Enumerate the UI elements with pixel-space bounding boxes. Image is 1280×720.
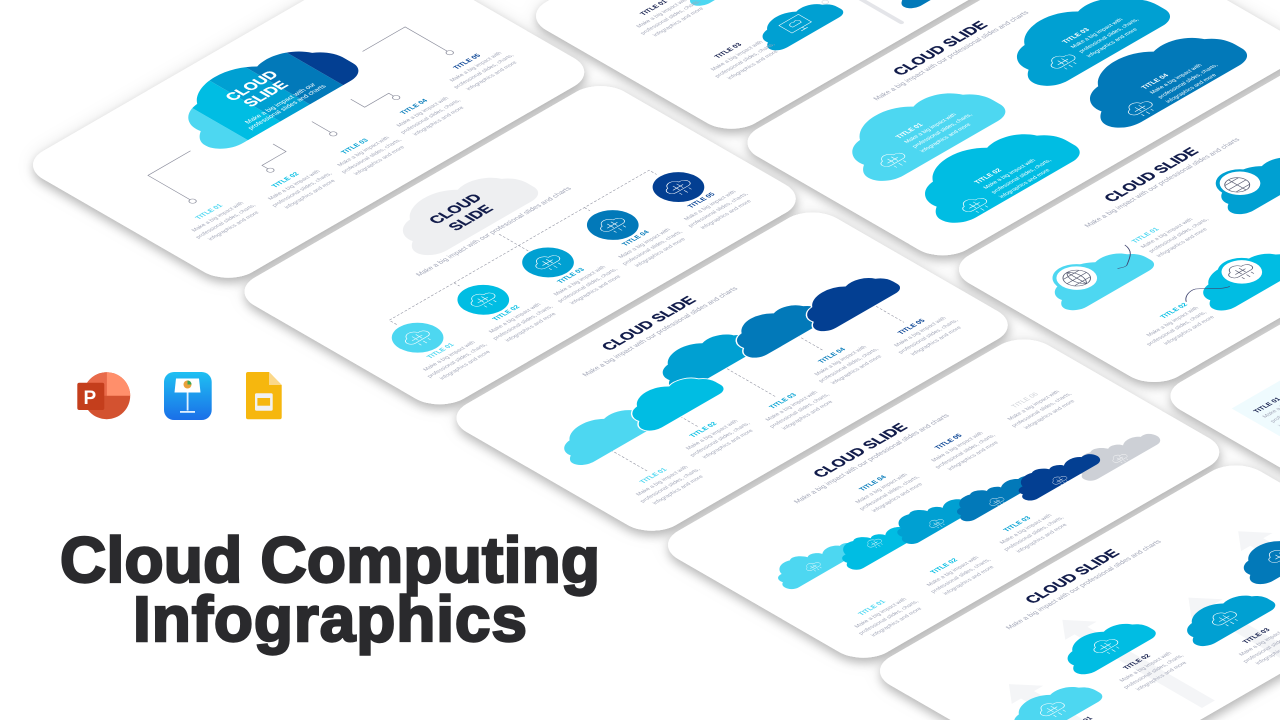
text: title 04: professional slides, charts, bbox=[1157, 63, 1220, 100]
text: title 01 bbox=[1252, 377, 1280, 428]
arrow 3 bbox=[1173, 589, 1280, 666]
icon 1 bbox=[875, 149, 913, 171]
text: title 01: infographics and more bbox=[439, 350, 492, 381]
text: title 03: TITLE 03 bbox=[1002, 515, 1033, 533]
main title: Cloud Computing bbox=[60, 524, 600, 596]
text: title 03: TITLE 03 bbox=[556, 267, 587, 285]
tagline: Make a big impact with our professional slides and charts bbox=[793, 413, 952, 505]
icon 1 bbox=[803, 560, 825, 573]
text: title 01: professional slides, charts, bbox=[858, 599, 921, 636]
text: title 02: Make a big impact with bbox=[983, 158, 1037, 190]
text: title 01: Make a big impact with bbox=[635, 465, 690, 497]
cloud 1 bbox=[1033, 241, 1159, 314]
panel: slide with six-step cloud row bbox=[654, 331, 1233, 666]
network badge bbox=[1206, 163, 1274, 203]
blue cloud bbox=[880, 0, 982, 11]
cloud 1 bbox=[818, 74, 1013, 187]
step cloud 5 bbox=[1004, 445, 1104, 503]
text: title 05: professional slides, charts, bbox=[897, 318, 960, 355]
text: title 02: TITLE 02 bbox=[271, 171, 301, 189]
icon 4 bbox=[986, 495, 1009, 508]
text: title 03: Make a big impact with bbox=[710, 40, 765, 72]
panel: slide with ring-icon clouds bbox=[945, 56, 1280, 390]
heading bbox=[425, 191, 502, 236]
text: title 02 bbox=[672, 411, 760, 462]
text: title 04: infographics and more bbox=[412, 106, 466, 137]
icon 3 bbox=[1045, 51, 1083, 73]
cloud 3 bbox=[641, 322, 765, 394]
cloud 1 bbox=[543, 398, 665, 469]
text: title 02: professional slides, charts, bbox=[930, 558, 993, 594]
circle 5 with icon bbox=[642, 166, 715, 208]
heading: CLOUD bbox=[425, 191, 486, 227]
text: title 04: infographics and more bbox=[1165, 73, 1218, 104]
cloud 2 bbox=[1181, 241, 1280, 314]
icon 3 bbox=[926, 517, 948, 530]
connector 2 bbox=[246, 144, 297, 173]
text: title 01 bbox=[841, 589, 929, 640]
text: title 03: TITLE 03 bbox=[768, 392, 799, 410]
icon: PowerPoint: P bbox=[84, 388, 96, 409]
striped cloud bbox=[188, 52, 358, 149]
text: title 02: TITLE 02 bbox=[973, 168, 1004, 185]
text: title 04: Make a big impact with bbox=[814, 345, 869, 377]
text: title 01 bbox=[622, 457, 710, 508]
text: title 04: TITLE 04 bbox=[399, 98, 430, 116]
cloud 1 bbox=[995, 676, 1107, 720]
icon: PowerPoint bbox=[77, 372, 130, 419]
text: title 02: TITLE 02 bbox=[1122, 653, 1153, 671]
text: title 01: Make a big impact with bbox=[422, 340, 477, 372]
cloud 2 bbox=[891, 115, 1088, 229]
heading: SLIDE bbox=[445, 203, 498, 233]
icon 4 bbox=[1122, 98, 1160, 120]
text: title 05: professional slides, charts, bbox=[453, 53, 516, 90]
text: title 05: Make a big impact with bbox=[893, 316, 948, 348]
dashed connectors bbox=[595, 292, 905, 471]
cloud heading: SLIDE bbox=[240, 79, 293, 109]
panel: slide with striped cloud and connectors bbox=[148, 26, 516, 240]
text: title 02: professional slides, charts, bbox=[492, 305, 555, 341]
panel: bottom right slide bbox=[1156, 182, 1280, 517]
cloud 2 bbox=[611, 366, 729, 435]
icon 5 bbox=[1049, 474, 1072, 487]
text: title 01: professional slides, charts, bbox=[1148, 217, 1211, 254]
text: title 04: TITLE 04 bbox=[817, 347, 848, 365]
text: title 04: professional slides, charts, bbox=[621, 230, 685, 266]
tagline: Make a big impact with our professional slides and charts bbox=[415, 186, 574, 278]
gray bar bbox=[799, 0, 901, 23]
arrow 1 bbox=[993, 675, 1142, 720]
text: title 02: infographics and more bbox=[1135, 661, 1189, 692]
dashed tree bbox=[370, 159, 661, 327]
panel: top slide with clouds and bar bbox=[522, 0, 1101, 137]
text: title 04: professional slides, charts, bbox=[400, 98, 463, 135]
text: title 02: professional slides, charts, bbox=[1146, 310, 1209, 347]
text: title 03: Make a big impact with bbox=[765, 390, 820, 422]
text: title 01: professional slides, charts, bbox=[639, 467, 702, 504]
text: title 01: Make a big impact with bbox=[854, 597, 909, 629]
text: title 02: Make a big impact with bbox=[267, 169, 322, 201]
text: title 02: professional slides, charts, bbox=[1123, 653, 1186, 690]
text: title 01: professional slides, charts, bbox=[426, 342, 489, 379]
tagline: Make a big impact with our professional slides and charts bbox=[872, 10, 1031, 102]
text: title 02: Make a big impact with bbox=[685, 419, 740, 451]
text: title 05: infographics and more bbox=[700, 199, 753, 230]
text: title 04: Make a big impact with bbox=[1149, 63, 1204, 95]
heading: CLOUD SLIDE bbox=[889, 19, 992, 78]
globe badge bbox=[1042, 258, 1111, 298]
icon: Google Slides bbox=[246, 372, 282, 419]
text: title 01: TITLE 01 bbox=[857, 599, 888, 617]
text: title 02 bbox=[1129, 300, 1217, 351]
text: title 03: Make a big impact with bbox=[337, 136, 391, 168]
text: title 02: professional slides, charts, bbox=[689, 421, 752, 458]
pale panel bbox=[1232, 328, 1280, 446]
text: title 01: TITLE 01 bbox=[194, 203, 225, 221]
text: title 05: TITLE 05 bbox=[687, 192, 717, 209]
cloud tagline: professional slides and charts bbox=[247, 84, 329, 131]
text: title 03 bbox=[323, 128, 412, 179]
tagline: Make a big impact with our professional slides and charts bbox=[581, 286, 740, 378]
text: title 01: TITLE 01 bbox=[895, 122, 925, 140]
text: title 02: TITLE 02 bbox=[1159, 302, 1190, 320]
text: title 03: professional slides, charts, bbox=[714, 42, 777, 79]
text: title 01: infographics and more bbox=[919, 123, 973, 154]
gear cloud badge bbox=[1207, 252, 1276, 292]
text: title 03: infographics and more bbox=[353, 145, 407, 176]
text: title 01 bbox=[1131, 207, 1219, 258]
text: title 05: Make a big impact with bbox=[449, 51, 504, 83]
text: title 01: professional slides, charts, bbox=[195, 203, 258, 240]
text: title 04: Make a big impact with bbox=[396, 96, 451, 128]
text: title 06: professional slides, charts, bbox=[1011, 392, 1074, 428]
text: title 01: Make a big impact with bbox=[191, 201, 246, 233]
text: title 02 bbox=[913, 548, 1001, 599]
tagline: Make a big impact with our professional slides and charts bbox=[1005, 539, 1164, 631]
step cloud 2 bbox=[827, 514, 927, 572]
text: title 05 bbox=[880, 308, 968, 359]
text: title 04: TITLE 04 bbox=[858, 475, 889, 492]
tagline: Make a big impact with our professional slides and charts bbox=[1084, 137, 1242, 229]
heading: CLOUD SLIDE bbox=[598, 294, 700, 353]
text: title 01 bbox=[622, 0, 711, 40]
cloud heading: CLOUD bbox=[222, 68, 283, 104]
text: title 05: infographics and more bbox=[947, 441, 1000, 472]
text: title 04: TITLE 04 bbox=[1140, 73, 1171, 90]
cloud 4 bbox=[715, 293, 834, 362]
mid-blue cloud bbox=[745, 0, 847, 53]
text: title 01 bbox=[178, 193, 266, 244]
text: title 03: professional slides, charts, bbox=[557, 267, 620, 304]
monitor icon bbox=[779, 14, 814, 35]
text: title 03: Make a big impact with bbox=[999, 513, 1054, 545]
text: title 02 bbox=[254, 162, 342, 213]
text: title 04: professional slides, charts, bbox=[858, 475, 922, 511]
text: title 02: Make a big impact with bbox=[1146, 306, 1201, 338]
cloud 3 bbox=[1199, 145, 1280, 218]
panel: slide with arrows and clouds bbox=[866, 457, 1280, 720]
text: title 02: infographics and more bbox=[702, 429, 755, 460]
step cloud 3 bbox=[881, 486, 986, 546]
text: title 01: professional slides, charts, bbox=[640, 0, 703, 36]
text: title 04: professional slides, charts, bbox=[818, 347, 881, 384]
arrow 2 bbox=[1047, 611, 1224, 713]
arrow 4 bbox=[1222, 522, 1280, 618]
text: title 02 bbox=[1106, 644, 1194, 694]
icon 1 bbox=[1034, 699, 1072, 720]
text: title 03 bbox=[1225, 617, 1280, 668]
text: title 02 bbox=[973, 148, 1061, 199]
text: title 03: professional slides, charts, bbox=[1003, 516, 1066, 552]
text: title 05 bbox=[436, 43, 524, 94]
text: title 04: infographics and more bbox=[830, 355, 884, 385]
text: title 03: infographics and more bbox=[781, 400, 835, 431]
connector 4 bbox=[351, 84, 401, 113]
text: title 06: Make a big impact with bbox=[1007, 390, 1062, 421]
cloud tagline: Make a big impact with our bbox=[244, 82, 319, 125]
text: title 05: professional slides, charts, bbox=[934, 433, 997, 470]
text: title 04: Make a big impact with bbox=[617, 228, 672, 259]
text: title 03: TITLE 03 bbox=[1061, 27, 1092, 45]
text: title 03 bbox=[1061, 8, 1149, 58]
icon 3 bbox=[1206, 608, 1244, 630]
text: title 05: Make a big impact with bbox=[930, 431, 985, 463]
text: title 05: TITLE 05 bbox=[934, 433, 964, 451]
icon 2 bbox=[1088, 636, 1126, 657]
text: title 02: TITLE 02 bbox=[929, 558, 960, 575]
text: title 04 bbox=[800, 337, 889, 388]
text: title 02 bbox=[475, 295, 563, 346]
text: title 05: professional slides, charts, bbox=[687, 192, 750, 228]
connector 3 bbox=[309, 120, 338, 137]
text: title 06 bbox=[994, 382, 1082, 433]
icon 4 bbox=[1262, 545, 1280, 567]
text: title 03: TITLE 03 bbox=[1242, 627, 1272, 645]
light cloud bbox=[668, 0, 770, 9]
text: title 01: infographics and more bbox=[870, 607, 924, 638]
circle 4 with icon bbox=[576, 204, 649, 246]
panel: slide with four text clouds bbox=[734, 0, 1280, 263]
circle 1 with icon bbox=[381, 317, 454, 359]
text: title 01: TITLE 01 bbox=[426, 342, 456, 360]
main title: Infographics bbox=[133, 583, 527, 655]
step cloud 1 bbox=[763, 533, 864, 591]
connector 1 bbox=[145, 151, 238, 204]
text: title 02: infographics and more bbox=[504, 312, 558, 343]
text: title 01 bbox=[895, 103, 982, 154]
text: title 02: infographics and more bbox=[1163, 315, 1216, 346]
text: title 02: Make a big impact with bbox=[488, 302, 543, 334]
text: title 02: Make a big impact with bbox=[926, 556, 981, 587]
connector 5 bbox=[363, 25, 455, 79]
text: title 01: infographics and more bbox=[652, 7, 706, 38]
icon 6 bbox=[1109, 452, 1132, 465]
text: title 06: TITLE 06 bbox=[1010, 392, 1041, 409]
text: title 01: Make a big impact with bbox=[903, 113, 958, 144]
heading: CLOUD SLIDE bbox=[1021, 547, 1124, 606]
text: title 03: professional slides, charts, bbox=[769, 393, 832, 429]
circle 2 with icon bbox=[447, 279, 520, 321]
text: title 03: professional slides, charts, bbox=[341, 138, 404, 174]
text: title 04 bbox=[604, 220, 692, 271]
text: title 02: infographics and more bbox=[998, 168, 1052, 199]
step cloud 4 bbox=[943, 467, 1040, 523]
text: title 05: infographics and more bbox=[465, 61, 519, 92]
cloud 4 bbox=[1224, 522, 1280, 587]
text: title 03: professional slides, charts, bbox=[1078, 17, 1141, 54]
text: title 02: professional slides, charts, bbox=[271, 172, 334, 208]
curve connector 1 bbox=[1101, 245, 1144, 270]
icon 2 bbox=[956, 194, 994, 216]
text: title 03 bbox=[986, 506, 1074, 557]
text: title 01: infographics and more bbox=[652, 475, 705, 506]
text: title 06: infographics and more bbox=[1023, 399, 1077, 430]
text: title 01: infographics and more bbox=[207, 211, 261, 242]
main title bbox=[60, 524, 600, 655]
text: title 04 bbox=[383, 88, 471, 139]
text: title 05: infographics and more bbox=[910, 326, 963, 357]
text: title 01: professional slides, charts, bbox=[911, 113, 975, 149]
cloud 3 bbox=[1168, 585, 1280, 649]
text: title 05: TITLE 05 bbox=[452, 53, 483, 71]
heading: CLOUD SLIDE bbox=[1100, 145, 1203, 205]
text: title 01: TITLE 01 bbox=[1131, 227, 1161, 244]
text: title 02: Make a big impact with bbox=[1119, 651, 1174, 683]
curve connector 2 bbox=[1179, 277, 1230, 307]
text: title 03: infographics and more bbox=[1086, 28, 1139, 58]
text: title 03 bbox=[540, 257, 628, 308]
icon: Keynote bbox=[164, 372, 212, 420]
circle 3 with icon bbox=[511, 241, 585, 283]
text: title 04: TITLE 04 bbox=[621, 230, 651, 247]
text: title 02: infographics and more bbox=[942, 565, 996, 596]
heading: CLOUD SLIDE bbox=[809, 421, 912, 480]
cloud 2 bbox=[1048, 613, 1160, 678]
text: title 01 bbox=[409, 333, 497, 384]
text: title 01: TITLE 01 bbox=[639, 467, 669, 485]
text: title 02: TITLE 02 bbox=[491, 304, 522, 322]
text: title 04: infographics and more bbox=[871, 482, 925, 513]
text: title 02: infographics and more bbox=[284, 179, 337, 210]
text: title 03 bbox=[697, 32, 785, 83]
text: title 04 bbox=[1140, 53, 1228, 104]
text: title 05: TITLE 05 bbox=[897, 318, 927, 336]
cloud 5 bbox=[786, 266, 906, 335]
text: title 03: infographics and more bbox=[726, 50, 780, 81]
step cloud 6 bbox=[1063, 424, 1165, 483]
text: title 05 bbox=[917, 423, 1005, 474]
text: title 03: Make a big impact with bbox=[1070, 18, 1125, 49]
text: title 04: infographics and more bbox=[634, 237, 688, 268]
cloud 3 bbox=[983, 0, 1178, 92]
panel: slide with gray cloud and circles bbox=[230, 78, 810, 412]
text: title 01: Make a big impact with bbox=[1140, 218, 1195, 249]
small ring bbox=[821, 0, 830, 5]
text: title 03 bbox=[752, 383, 840, 434]
text: title 03: infographics and more bbox=[1015, 523, 1069, 554]
text: title 03: Make a big impact with bbox=[553, 265, 608, 297]
icon 2 bbox=[864, 537, 886, 550]
gray cloud bbox=[373, 161, 545, 260]
text: title 05: Make a big impact with bbox=[683, 190, 738, 222]
text: title 03: TITLE 03 bbox=[340, 138, 371, 155]
cloud heading bbox=[222, 68, 297, 112]
text: title 04: Make a big impact with bbox=[855, 473, 909, 504]
cloud 4 bbox=[1055, 18, 1255, 134]
text: title 03: infographics and more bbox=[569, 275, 623, 306]
text: title 04 bbox=[841, 465, 930, 516]
text: title 05 bbox=[670, 182, 758, 233]
text: title 01: infographics and more bbox=[1156, 227, 1209, 258]
panel: slide with linked clouds bbox=[442, 204, 1022, 539]
text: title 02: professional slides, charts, bbox=[990, 158, 1054, 195]
text: title 03: TITLE 03 bbox=[713, 42, 744, 60]
text: title 02: TITLE 02 bbox=[689, 421, 719, 439]
